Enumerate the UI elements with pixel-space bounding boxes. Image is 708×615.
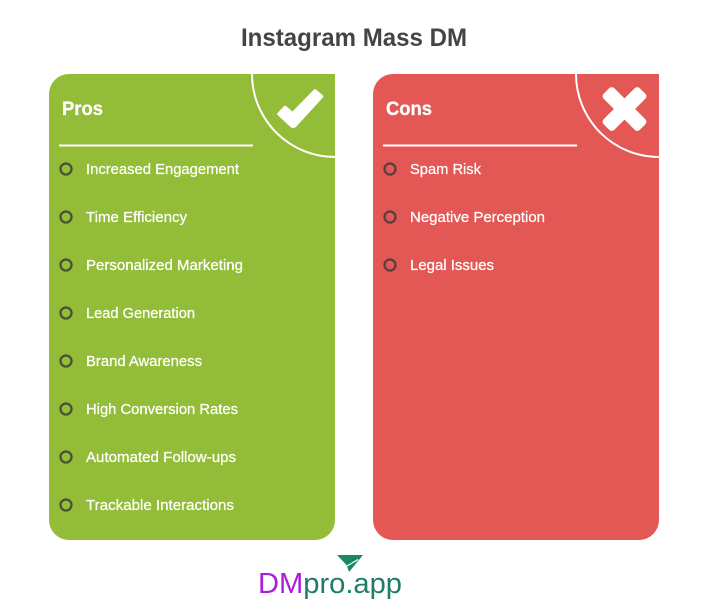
item: increased engagement: Increased Engagement [86,162,239,178]
cons list [384,162,545,274]
item: brand awareness: Brand Awareness [86,354,202,370]
item: automated follow-ups: Automated Follow-ups [86,450,236,466]
pros divider [59,144,253,146]
icon: paper plane [337,555,363,572]
icon: cross mark [601,86,648,132]
item: negative perception: Negative Perception [410,210,545,226]
item: time efficiency: Time Efficiency [86,210,188,226]
pros heading: Pros [62,99,103,120]
cons background [373,74,659,540]
item: personalized marketing: Personalized Marketing [86,258,243,274]
pros list [60,162,243,514]
cons divider [383,144,577,146]
logo wordmark: DMpro.app [258,568,402,600]
item: trackable interactions: Trackable Interactions [86,498,234,514]
pros corner arc [252,74,335,157]
item: high conversion rates: High Conversion Rates [86,402,238,418]
icon: check mark [279,91,322,126]
cons corner arc [576,74,659,157]
item: spam risk: Spam Risk [410,162,482,178]
item: legal issues: Legal Issues [410,258,494,274]
pros background [49,74,335,540]
title: Instagram Mass DM [241,24,467,52]
logo: DMpro.app [258,555,402,600]
panel: pros [49,74,335,540]
cons heading: Cons [386,99,432,120]
panel: cons [373,74,659,540]
item: lead generation: Lead Generation [86,306,195,322]
